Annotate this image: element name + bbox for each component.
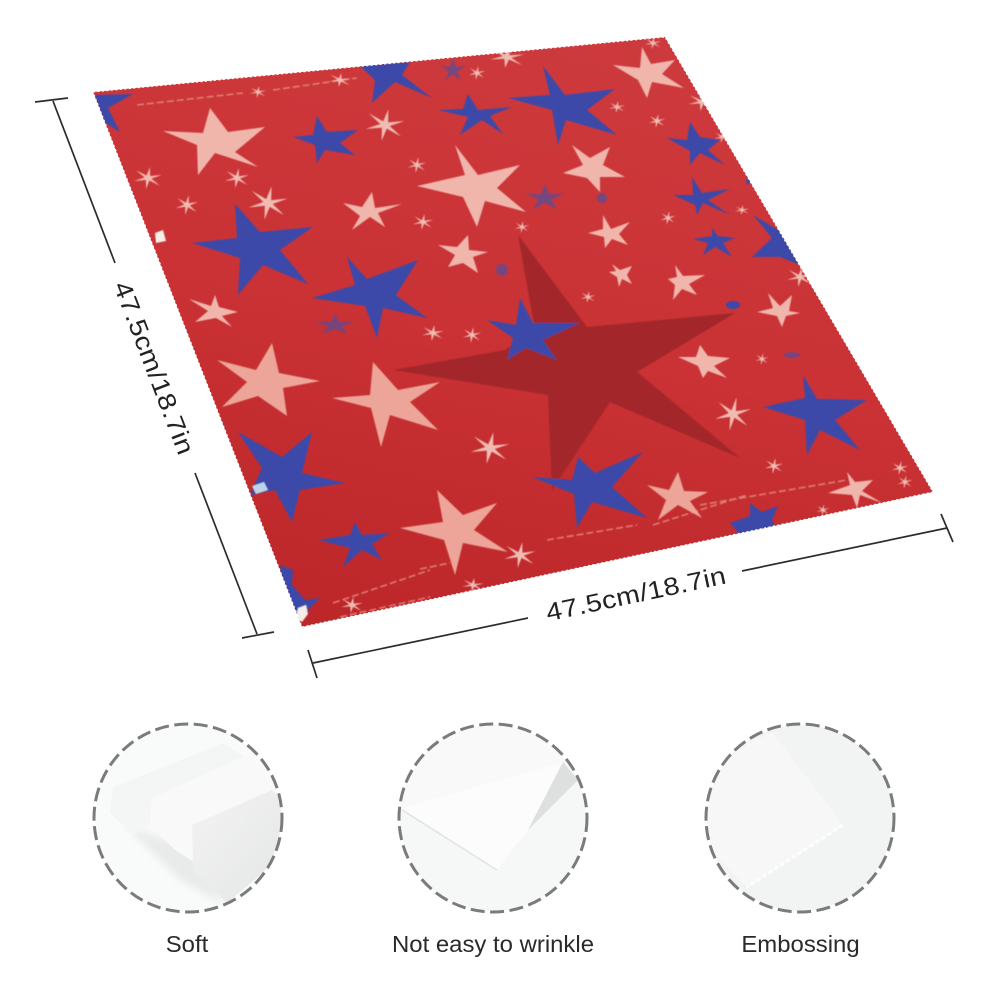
pink stars: [163, 47, 882, 508]
label: not easy to wrinkle: Not easy to wrinkle: [392, 931, 594, 957]
label: soft: Soft: [166, 931, 209, 957]
worn white flecks: [155, 230, 308, 622]
feature: soft: [94, 724, 290, 957]
width label: 47.5cm/18.7in: [543, 561, 729, 627]
icon: scalloped cloth corner: [746, 824, 844, 888]
icon: rolled white cloth: [136, 790, 280, 902]
dimension: height: [35, 98, 274, 638]
blue stars: [95, 62, 867, 618]
salmon stars, lower area: [217, 343, 708, 575]
label: embossing: Embossing: [741, 931, 860, 957]
icon: folded cloth corner: [402, 762, 578, 870]
feature: not easy to wrinkle: [394, 722, 593, 957]
large dark red star: [393, 235, 740, 490]
faded blue stars: [315, 58, 800, 358]
small sparkle stars: [133, 36, 913, 615]
feature: embossing: [690, 724, 894, 957]
height label: 47.5cm/18.7in: [108, 277, 200, 459]
pinked fabric edge: [93, 37, 933, 627]
pale edge streaks: [137, 78, 847, 617]
panel: red star fabric: [93, 36, 933, 627]
dimension: width: [308, 514, 953, 678]
